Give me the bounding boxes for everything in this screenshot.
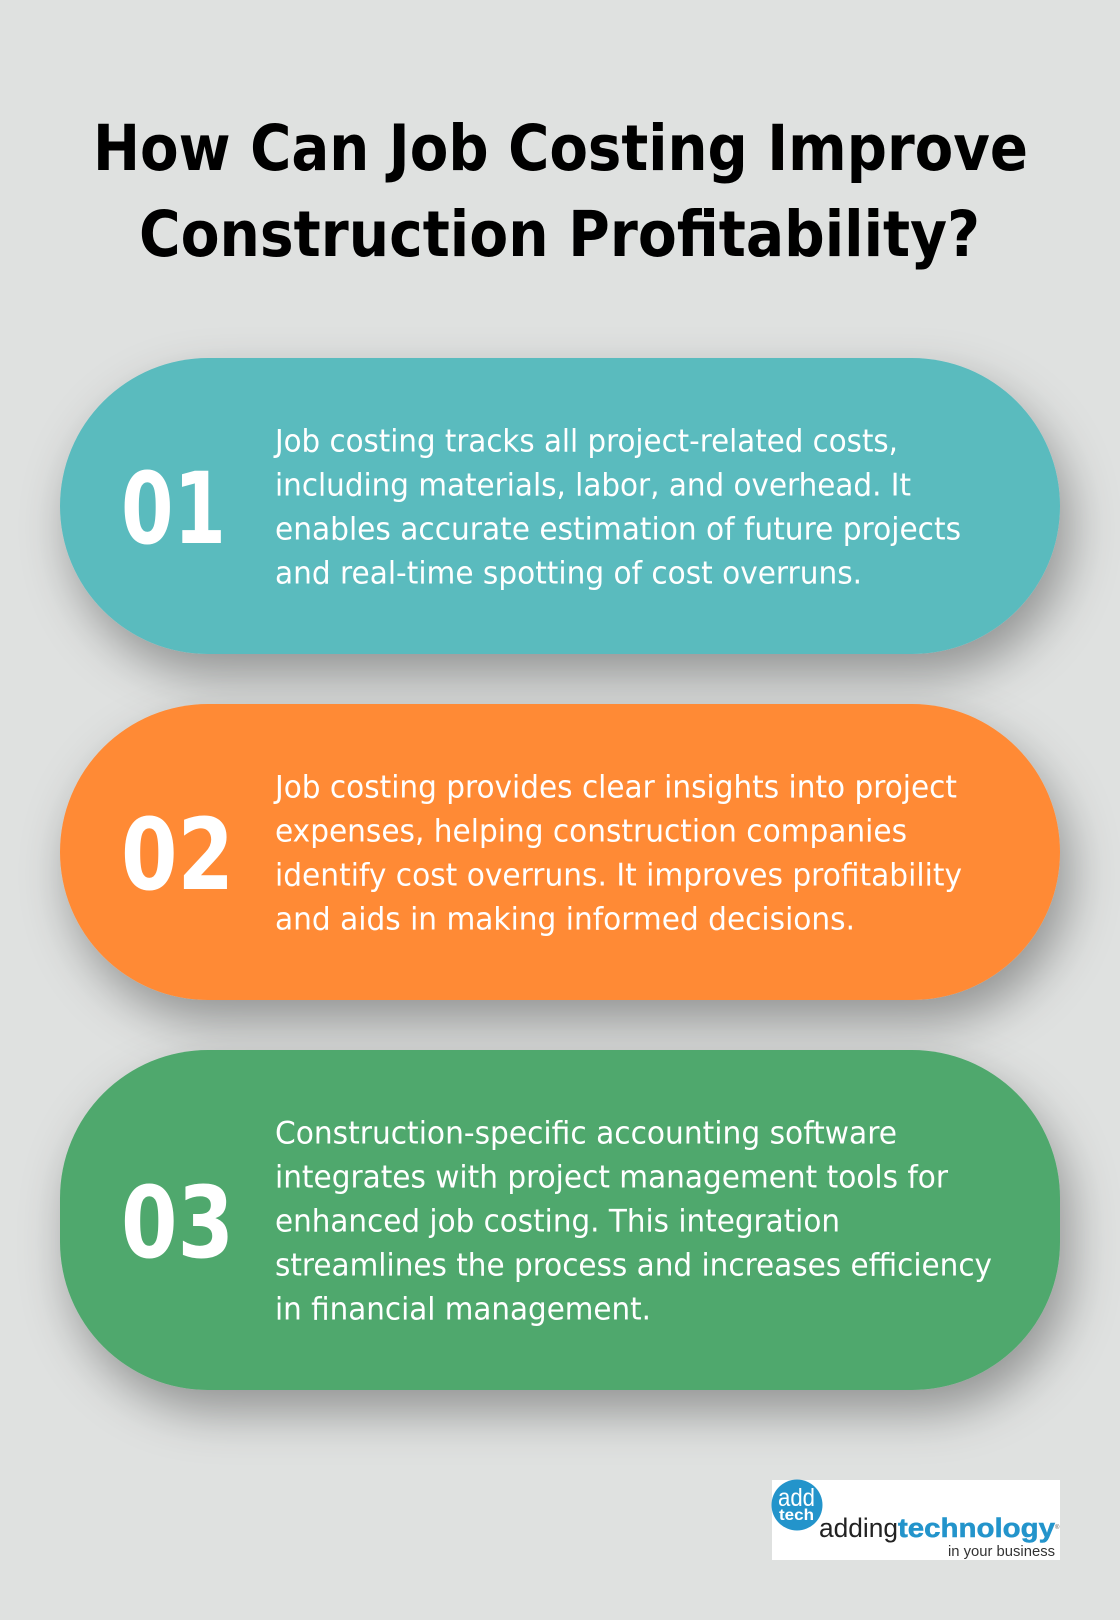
icon: add tech circle: tech bbox=[779, 1507, 814, 1524]
number 03: 03 bbox=[121, 1166, 234, 1281]
text block 03: integrates with project management tools for bbox=[275, 1160, 948, 1196]
panel: step 01 bbox=[60, 358, 1060, 654]
title bbox=[93, 112, 1028, 271]
text block 01: enables accurate estimation of future projects bbox=[275, 512, 961, 548]
text block 03: streamlines the process and increases efficiency bbox=[275, 1248, 992, 1284]
text block 02 bbox=[273, 770, 962, 938]
text block 02: Job costing provides clear insights into project bbox=[273, 770, 957, 806]
text block 03: Construction-specific accounting software bbox=[275, 1116, 897, 1152]
title: Construction Profitability? bbox=[139, 198, 980, 271]
logo: adding technology: ® bbox=[1055, 1524, 1060, 1531]
text block 02: identify cost overruns. It improves profitability bbox=[275, 858, 962, 894]
panel: step 03 bbox=[60, 1050, 1060, 1390]
number 01: 01 bbox=[121, 452, 226, 567]
logo: adding technology: technology bbox=[898, 1513, 1055, 1543]
text block 01: and real-time spotting of cost overruns. bbox=[275, 556, 862, 592]
text block 03: enhanced job costing. This integration bbox=[275, 1204, 840, 1240]
title: How Can Job Costing Improve bbox=[93, 112, 1028, 185]
logo tagline: in your business bbox=[948, 1544, 1055, 1560]
text block 01: Job costing tracks all project-related costs, bbox=[273, 424, 898, 460]
text block 02: and aids in making informed decisions. bbox=[275, 902, 855, 938]
icon: add tech circle: add bbox=[778, 1484, 815, 1512]
pill background teal bbox=[60, 358, 1060, 654]
text block 03: in financial management. bbox=[275, 1292, 651, 1328]
icon: add tech circle bbox=[772, 1480, 822, 1530]
text block 01 bbox=[273, 424, 961, 592]
pill background orange bbox=[60, 704, 1060, 1000]
logo: adding technology bbox=[772, 1480, 1060, 1560]
text block 02: expenses, helping construction companies bbox=[275, 814, 907, 850]
panel: step 02 bbox=[60, 704, 1060, 1000]
text block 03 bbox=[275, 1116, 992, 1328]
text block 01: including materials, labor, and overhead. It bbox=[275, 468, 911, 504]
logo wordmark: adding bbox=[819, 1513, 898, 1543]
pill background green bbox=[60, 1050, 1060, 1390]
number 02: 02 bbox=[121, 798, 234, 913]
